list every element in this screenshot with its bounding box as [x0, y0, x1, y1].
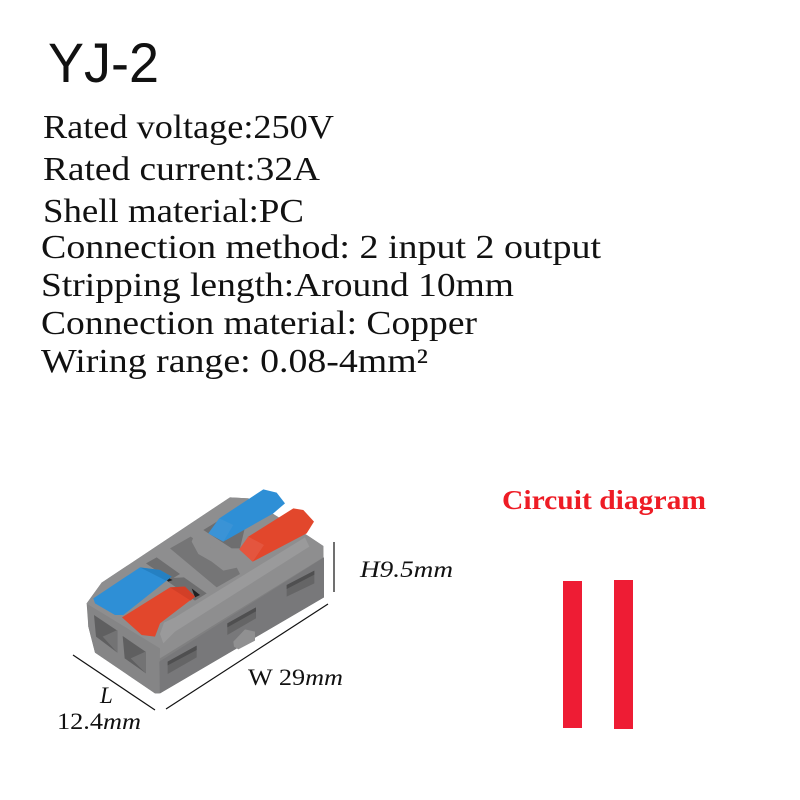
specifications text block: Connection material: Copper: [41, 305, 478, 342]
circuit diagram bars: [563, 580, 633, 729]
blue lever back: [208, 489, 285, 542]
front openings: [94, 615, 146, 673]
dimension: height: H9.5mm: [359, 557, 453, 582]
front lever openings: [146, 557, 180, 580]
circuit diagram heading: Circuit diagram: [502, 485, 707, 515]
dimension: height: [334, 542, 453, 592]
red lever back: [239, 508, 314, 562]
dimension: length: [57, 655, 155, 734]
specifications text block: [41, 109, 602, 380]
dimension: width: [166, 604, 343, 709]
dimension: length: L: [99, 683, 113, 708]
title: YJ-2: [48, 31, 159, 94]
specifications text block: Stripping length:Around 10mm: [41, 267, 514, 304]
dimension: width: W 29 mm: [248, 665, 343, 690]
specifications text block: Rated voltage:250V: [43, 109, 334, 146]
top recess: [170, 537, 240, 587]
dimension: length: 12.4 mm: [57, 709, 141, 734]
specifications text block: Rated current:32A: [43, 151, 320, 188]
right side rail: [160, 537, 309, 643]
top face: [87, 497, 323, 658]
blue lever front: [93, 567, 172, 615]
front face: [87, 604, 160, 693]
connector product illustration: [87, 489, 324, 693]
specifications text block: Shell material:PC: [43, 193, 304, 230]
specifications text block: Wiring range: 0.08-4mm²: [41, 343, 428, 380]
red lever front: [122, 587, 195, 637]
back lever opening: [203, 512, 248, 548]
side slots: [168, 571, 314, 674]
side face: [159, 557, 324, 693]
specifications text block: Connection method: 2 input 2 output: [41, 229, 602, 266]
side clip: [233, 629, 255, 649]
connector body silhouette: [87, 497, 324, 693]
